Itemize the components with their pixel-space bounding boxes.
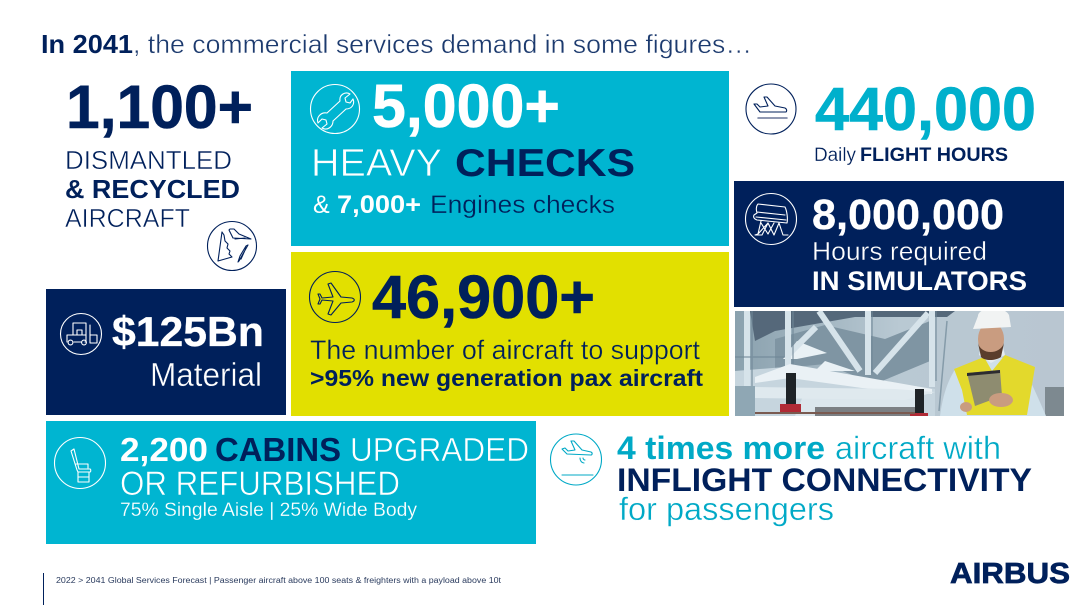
panel: daily flight hours <box>746 75 1036 166</box>
panel: simulators: 8,000,000 <box>812 191 1004 239</box>
footnote: 2022 > 2041 Global Services Forecast | Passenger aircraft above 100 seats & freighters with a payload above 10t <box>56 576 502 585</box>
title: In 2041 <box>41 29 133 59</box>
panel: cabins: 2,200 <box>120 431 208 468</box>
panel: inflight connectivity: aircraft with <box>835 430 1001 466</box>
panel: material <box>46 289 286 415</box>
panel: inflight connectivity: for passengers <box>619 491 834 527</box>
panel: heavy checks: CHECKS <box>455 142 635 185</box>
panel: material: $125Bn <box>112 308 264 355</box>
icon: plane top view <box>310 272 360 322</box>
panel: daily flight hours: 440,000 <box>815 75 1036 143</box>
panel: cabins <box>46 421 536 544</box>
panel: dismantled and recycled aircraft: 1,100+ <box>66 73 253 141</box>
panel: daily flight hours: FLIGHT HOURS <box>860 145 1008 166</box>
panel: heavy checks <box>291 71 729 246</box>
panel: inflight connectivity: INFLIGHT CONNECTIVITY <box>617 462 1032 498</box>
panel: heavy checks: 7,000+ <box>337 191 421 219</box>
icon: forklift <box>60 314 102 354</box>
panel: inflight connectivity: 4 times more <box>617 430 825 466</box>
panel: cabins: OR REFURBISHED <box>120 465 400 503</box>
icon: plane with wifi <box>550 434 602 485</box>
panel: heavy checks: & <box>313 191 330 219</box>
panel: dismantled and recycled aircraft: AIRCRAFT <box>65 203 190 233</box>
icon: flight simulator <box>746 194 796 244</box>
panel: dismantled and recycled aircraft: & RECYCLED <box>65 174 240 204</box>
panel: heavy checks: 5,000+ <box>372 72 560 140</box>
panel: dismantled and recycled aircraft <box>65 73 256 270</box>
panel: simulators: Hours required <box>812 236 987 266</box>
panel: simulators: IN SIMULATORS <box>812 266 1027 296</box>
panel: inflight connectivity <box>550 430 1032 527</box>
panel: simulators <box>734 181 1064 307</box>
panel: dismantled and recycled aircraft: DISMANTLED <box>65 145 232 175</box>
logo: Airbus: AIRBUS <box>950 558 1070 590</box>
panel: cabins: CABINS <box>215 431 341 468</box>
title: , the commercial services demand in some figures… <box>133 29 752 59</box>
panel: material: Material <box>150 356 262 393</box>
panel: aircraft to support: 46,900+ <box>372 263 595 331</box>
panel: cabins: UPGRADED <box>350 431 529 468</box>
icon: wrench <box>310 84 360 134</box>
icon: aircraft parts <box>208 222 256 270</box>
panel: aircraft to support <box>291 252 729 416</box>
panel: daily flight hours: Daily <box>814 145 856 166</box>
icon: departing plane <box>746 84 796 134</box>
icon: seat <box>54 438 106 488</box>
panel: heavy checks: Engines checks <box>430 191 615 219</box>
panel: aircraft to support: >95% new generation pax aircraft <box>310 365 703 391</box>
photo: engineer with tablet in simulator hall <box>735 308 1064 416</box>
panel: aircraft to support: The number of aircraft to support <box>310 335 700 365</box>
panel: heavy checks: HEAVY <box>311 142 442 185</box>
panel: cabins: 75% Single Aisle | 25% Wide Body <box>120 500 417 521</box>
